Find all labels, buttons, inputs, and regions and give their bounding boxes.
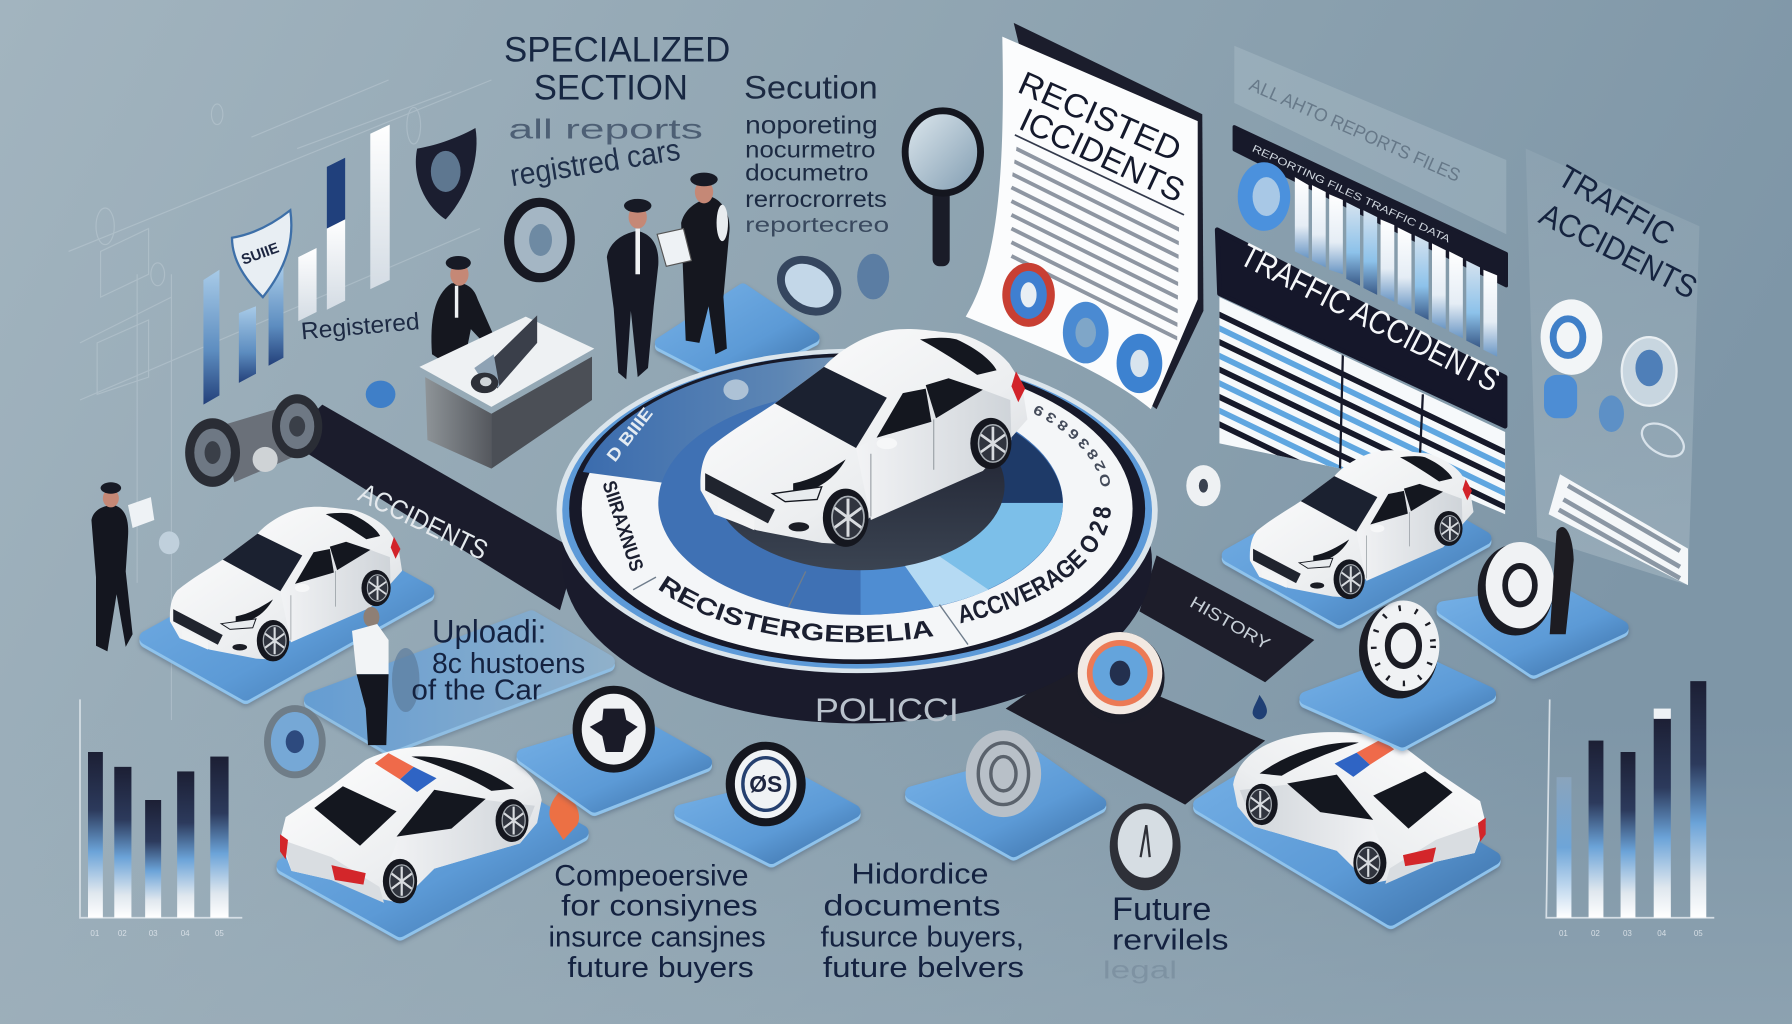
icon: blue drop — [1253, 695, 1267, 719]
traffic accidents table — [1219, 297, 1506, 514]
panel: officers platform — [661, 289, 814, 379]
label: Registered: Registered — [300, 308, 421, 345]
heading: specialized section: SPECIALIZED — [504, 30, 730, 70]
icon: gauge dial — [1110, 803, 1181, 890]
chart: vertical white and blue bars — [1295, 177, 1497, 357]
icon: small white circle — [1186, 465, 1221, 506]
lower right band — [1006, 661, 1265, 805]
history band — [1139, 555, 1314, 682]
person beside tyre — [1550, 527, 1574, 634]
text: section list: noporeting — [745, 112, 878, 140]
upload person — [352, 607, 419, 745]
text: section list: rerrocrorrets — [745, 186, 887, 212]
panel: faded top data sheet: ALL AHTO REPORTS FILES — [1246, 74, 1464, 186]
panel: uploading pad — [311, 617, 608, 745]
officer left standing — [607, 199, 658, 379]
card icons — [1541, 299, 1690, 463]
panel: left crashed car pad — [146, 537, 427, 694]
panel: tyre pad center right — [1306, 600, 1489, 741]
text: documents column: future belvers — [823, 952, 1024, 984]
desk with laptop — [419, 315, 594, 469]
text: future column: legal — [1103, 956, 1177, 984]
icon: target orange ring — [1075, 632, 1165, 723]
icon: blue pod — [366, 381, 395, 408]
table header dark band — [1234, 127, 1506, 286]
label: accidents: ACCIDENTS — [354, 477, 493, 566]
heading: specialized section — [504, 30, 730, 107]
bar chart lower left: 01 — [90, 929, 100, 938]
panel: traffic accidents translucent card: ACCIDENTS — [1534, 196, 1703, 306]
text: documents column: fusurce buyers, — [821, 921, 1024, 953]
platform ring text: O 2 8 3 6 8 3 9 — [1034, 406, 1110, 486]
text: uploading histories of the car: Uploadi: — [432, 613, 546, 649]
bar chart lower right: 02 — [1591, 929, 1600, 938]
small round icon — [159, 531, 179, 554]
icon: white shield badge: SUIIE — [239, 240, 281, 269]
bar chart upper left — [203, 125, 390, 405]
text: future column: rervilels — [1112, 925, 1229, 957]
text: section list: reportecreo — [745, 212, 889, 237]
seal: red and blue — [1002, 263, 1055, 327]
seal: blue center — [1063, 302, 1109, 363]
platform ring text: RECISTERGEBELIA — [658, 576, 934, 642]
table header dark band: REPORTING FILES TRAFFIC DATA — [1250, 144, 1452, 245]
panel: traffic accidents translucent card — [1526, 149, 1703, 585]
left police car — [280, 746, 542, 903]
seal: blue right — [1117, 334, 1162, 393]
text: uploading histories of the car: of the Car — [411, 674, 542, 706]
traffic accidents banner: TRAFFIC ACCIDENTS — [1234, 237, 1505, 400]
icon: location pin — [549, 789, 579, 840]
bar chart lower right: 03 — [1623, 929, 1632, 938]
text: future column: Future — [1112, 891, 1211, 927]
bar chart lower right: 05 — [1694, 929, 1703, 938]
card lower sheet — [1549, 474, 1688, 585]
bar chart lower left: 05 — [215, 929, 224, 938]
heading: specialized section: SECTION — [534, 67, 688, 107]
small blue badges — [765, 244, 889, 328]
faded wireframe panel upper left — [69, 80, 491, 720]
text: future column — [1103, 891, 1229, 984]
icon: blue circle on table — [1238, 162, 1290, 231]
panel: document icon pad: ØS — [749, 771, 782, 797]
text: compensive column: Compeoersive — [554, 860, 749, 893]
overturned car wheels — [185, 394, 322, 487]
panel: registered accidents document: RECISTED — [1013, 65, 1186, 169]
right crashed car — [1250, 450, 1474, 599]
bar chart lower left: 04 — [181, 929, 190, 938]
small band badge — [723, 379, 749, 400]
blue band label: D BIIIE — [602, 403, 657, 465]
bar chart lower left: 03 — [149, 929, 158, 938]
desk officer — [431, 256, 496, 363]
panel: right police pad — [1200, 743, 1494, 919]
icon: magnifying glass — [905, 111, 981, 266]
platform ring text: ACCIVERAGE O 2 8 — [960, 507, 1111, 624]
officer with clipboard left — [91, 482, 154, 651]
text: section list — [744, 69, 889, 237]
left crashed car — [170, 507, 402, 661]
panel: faded top data sheet — [1234, 46, 1506, 234]
platform ring text — [658, 406, 1111, 642]
text: all registered cars: registred cars — [508, 132, 682, 193]
accident road band — [286, 405, 577, 610]
officer right with clipboard — [657, 173, 730, 354]
history band: HISTORY — [1187, 592, 1274, 654]
panel: registered accidents document — [966, 23, 1203, 409]
panel: document icon pad — [681, 742, 854, 857]
text: compensive column — [549, 860, 766, 984]
base label: police: POLICCI — [815, 692, 959, 728]
text: section list: Secution — [744, 69, 878, 105]
panel: tyre pad right — [1443, 542, 1622, 669]
panel: left police pad — [283, 768, 582, 930]
bar chart lower right — [1546, 681, 1714, 938]
right police car — [1233, 732, 1486, 884]
text: section list: nocurmetro — [745, 137, 875, 163]
central platform — [556, 348, 1158, 728]
text: compensive column: future buyers — [567, 952, 754, 984]
side ring label: SIIRAXNUS — [598, 478, 647, 574]
bar chart lower right: 04 — [1657, 929, 1667, 938]
center car — [700, 329, 1027, 547]
bar chart lower left — [80, 699, 242, 938]
panel: right crashed car pad — [1229, 474, 1485, 618]
text: documents column — [821, 858, 1024, 984]
text: all registered cars: all reports — [509, 113, 703, 144]
text: compensive column: insurce cansjnes — [549, 921, 766, 953]
icon: white shield badge — [232, 210, 291, 297]
panel: registered accidents document: ICCIDENTS — [1014, 102, 1190, 210]
bar chart lower right: 01 — [1559, 929, 1568, 938]
text: compensive column: for consiynes — [561, 889, 758, 922]
text: uploading histories of the car: 8c hustoens — [432, 648, 585, 680]
panel: traffic accidents translucent card: TRAFFIC — [1552, 158, 1681, 253]
icon: blue round badge — [264, 705, 326, 778]
icon: dark wheel badge — [504, 198, 575, 282]
text: uploading histories of the car — [411, 613, 585, 706]
panel: fingerprint icon pad — [912, 730, 1099, 850]
panel: plus icon pad — [523, 686, 705, 806]
text: documents column: Hidordice — [851, 858, 989, 890]
icon: dark shield badge — [416, 128, 477, 219]
text: section list: documetro — [745, 160, 869, 186]
bar chart lower left: 02 — [118, 929, 127, 938]
text: documents column: documents — [823, 889, 1001, 922]
